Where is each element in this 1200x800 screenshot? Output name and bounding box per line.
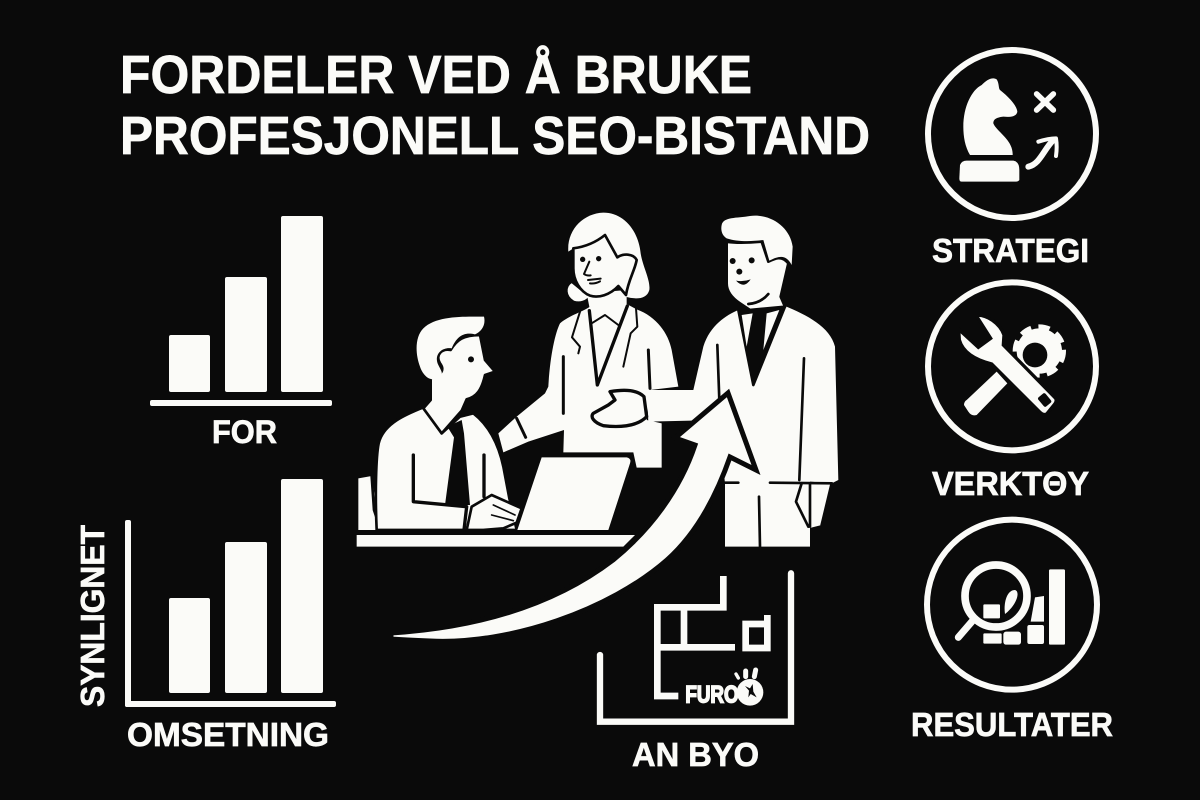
standing man [592, 216, 838, 547]
bar chart: for [150, 216, 332, 450]
bar chart: omsetning: OMSETNING [127, 716, 329, 753]
woman [498, 213, 678, 468]
icon: resultater [927, 520, 1097, 690]
furo logo: FURO [685, 682, 739, 709]
title: PROFESJONELL SEO-BISTAND [120, 106, 870, 166]
label: an byo: AN BYO [632, 736, 759, 773]
illustration: team of three people [357, 213, 838, 547]
title [120, 45, 870, 166]
bar chart: for: FOR [212, 414, 277, 450]
icon: verktoy [928, 282, 1096, 450]
laptop [517, 457, 630, 530]
icon: strategi [928, 50, 1096, 218]
title: FORDELER VED Å BRUKE [120, 45, 752, 105]
label: resultater: RESULTATER [911, 706, 1113, 743]
bar chart: omsetning: SYNLIGNET [74, 525, 111, 707]
furo logo [685, 670, 763, 709]
bar chart: omsetning [74, 479, 336, 753]
label: verktoy: VERKTΘY [932, 465, 1089, 502]
arrow: growth [391, 393, 756, 641]
label: strategi: STRATEGI [932, 232, 1089, 269]
icon: floor plan with furo logo [600, 573, 791, 722]
seated man [357, 317, 635, 547]
